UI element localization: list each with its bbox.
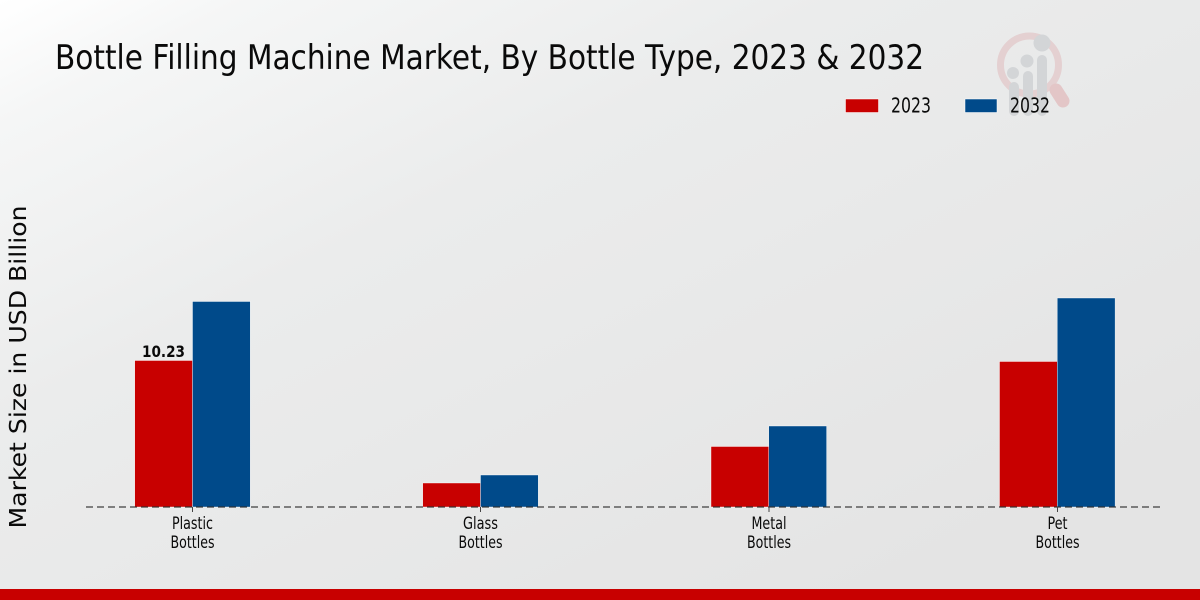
x-axis label: Pet Bottles: Pet	[1048, 514, 1068, 534]
x-axis label: Pet Bottles: Bottles	[1036, 533, 1080, 553]
x-axis label: Metal Bottles	[747, 514, 791, 553]
group: Metal Bottles	[711, 426, 827, 507]
group: Pet Bottles	[1000, 298, 1115, 507]
x-axis label: Glass Bottles: Glass	[463, 514, 498, 534]
group: Plastic Bottles	[135, 302, 250, 507]
x-axis label: Glass Bottles: Bottles	[458, 533, 503, 553]
footer bar	[0, 589, 1200, 600]
legend item: 2032: 2032	[1010, 94, 1050, 118]
x-axis label: Pet Bottles	[1036, 514, 1080, 553]
legend item: 2032	[965, 94, 1050, 118]
group: Glass Bottles	[423, 475, 538, 507]
legend item: 2023	[846, 94, 931, 118]
icon: watermark logo	[1000, 34, 1063, 116]
x-axis label: Plastic Bottles	[170, 514, 215, 553]
data label: 10.23: 10.23	[142, 342, 185, 361]
legend	[846, 94, 1050, 118]
x-axis label: Metal Bottles: Bottles	[747, 533, 791, 553]
title: Bottle Filling Machine Market, By Bottle Type, 2023 & 2032	[55, 38, 924, 78]
x-axis label: Glass Bottles	[458, 514, 503, 553]
legend item: 2023: 2023	[891, 94, 931, 118]
x-axis label: Plastic Bottles: Bottles	[170, 533, 215, 553]
x-axis label: Metal Bottles: Metal	[752, 514, 786, 534]
bar chart	[135, 298, 1115, 507]
y-axis label: Market Size in USD Billion	[4, 206, 32, 528]
x-axis label: Plastic Bottles: Plastic	[172, 514, 213, 534]
